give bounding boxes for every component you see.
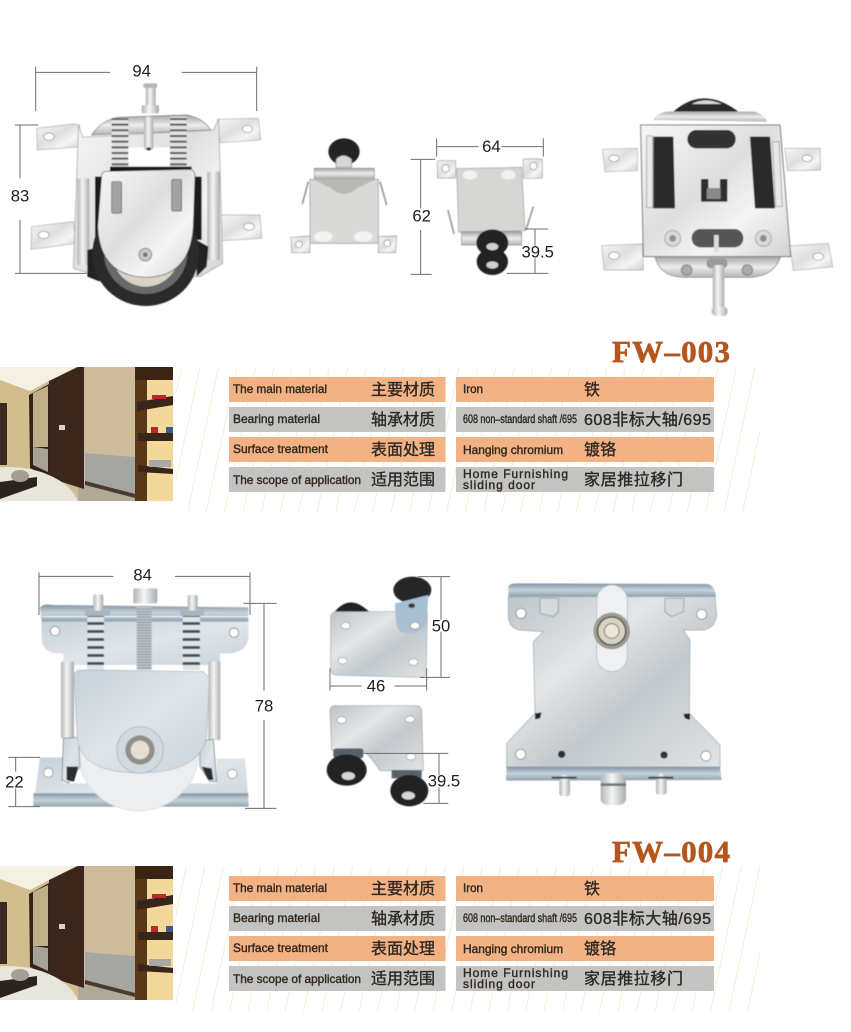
row: surface treatment: Hanging chromium: [463, 443, 563, 457]
row: scope of application: Home Furnishing: [463, 467, 568, 481]
row: main material: [229, 377, 714, 402]
model title: FW-003: FW–003: [612, 334, 730, 369]
row: surface treatment: Surface treatment: [233, 442, 329, 456]
row: bearing material: Bearing material: [233, 412, 320, 426]
row: bearing material: 608 non–standard shaft /695: [463, 911, 577, 925]
row: scope of application: Home Furnishing: [463, 966, 568, 980]
row: scope of application: [229, 467, 714, 492]
row: bearing material: 608 non–standard shaft /695: [463, 412, 577, 426]
row: main material: 铁: [584, 880, 600, 898]
row: scope of application: sliding door: [463, 977, 535, 991]
dimension: height 62: 62: [412, 206, 431, 225]
dimension: width 84: [39, 565, 250, 615]
dimension: width 46: [330, 668, 427, 696]
product photo: FW-003 bracket side views with dimensions: [291, 137, 554, 275]
row: main material: Iron: [463, 881, 483, 895]
row: bearing material: 608非标大轴/695: [584, 411, 711, 429]
row: scope of application: The scope of application: [233, 473, 361, 487]
row: scope of application: [229, 966, 714, 991]
application photo: sliding door room, FW-004: [0, 866, 173, 1032]
dimension: width 94: [36, 61, 257, 111]
row: bearing material: Bearing material: [233, 911, 320, 925]
row: surface treatment: [229, 936, 714, 961]
row: bearing material: 608非标大轴/695: [584, 910, 711, 928]
dimension: 39.5: 39.5: [428, 771, 460, 790]
row: surface treatment: [229, 437, 714, 462]
background: diagonal line texture, FW-003: [176, 367, 760, 512]
dimension: width 46: 46: [367, 677, 385, 696]
row: main material: 主要材质: [371, 381, 435, 399]
row: surface treatment: Hanging chromium: [463, 942, 563, 956]
dimension: height 78: 78: [255, 697, 273, 716]
dimension: width 64: 64: [482, 137, 501, 156]
row: surface treatment: 表面处理: [371, 441, 435, 459]
dimension: 39.5: 39.5: [521, 242, 554, 261]
row: surface treatment: 镀铬: [584, 440, 616, 459]
product photo: FW-004 rear view: [506, 583, 722, 805]
dimension: height 83: 83: [11, 187, 29, 206]
row: scope of application: 适用范围: [371, 471, 435, 489]
row: scope of application: 适用范围: [371, 970, 435, 988]
dimension: width 84: 84: [133, 565, 152, 584]
row: bearing material: [229, 906, 714, 931]
dimension: height 50: [418, 577, 450, 677]
dimension: height 83: [11, 125, 87, 273]
row: main material: The main material: [233, 881, 327, 895]
dimension: height 50: 50: [432, 617, 450, 636]
specification table: FW-003: [229, 377, 714, 492]
dimension: 22: 22: [5, 773, 24, 792]
row: bearing material: [229, 407, 714, 432]
row: surface treatment: 镀铬: [584, 939, 616, 958]
specification table: FW-004: [229, 876, 714, 991]
dimension: height 62: [411, 159, 435, 274]
row: scope of application: The scope of application: [233, 972, 361, 986]
product photo: FW-004 main roller with dimensions: [5, 565, 277, 811]
dimension: height 78: [243, 603, 277, 808]
dimension: 39.5: [363, 753, 460, 803]
product photo: FW-004 bracket side views with dimensions: [327, 577, 460, 806]
row: main material: Iron: [463, 382, 483, 396]
row: main material: The main material: [233, 382, 327, 396]
row: surface treatment: Surface treatment: [233, 941, 329, 955]
application photo: sliding door room, FW-003: [0, 367, 173, 557]
row: main material: 铁: [584, 381, 600, 399]
model title: FW-004: FW–004: [612, 834, 730, 869]
product photo: FW-003 main roller with dimensions: [11, 61, 262, 306]
row: scope of application: 家居推拉移门: [584, 471, 683, 489]
row: surface treatment: 表面处理: [371, 940, 435, 958]
row: bearing material: 轴承材质: [371, 910, 435, 928]
background: diagonal line texture, FW-004: [176, 866, 760, 1011]
row: main material: 主要材质: [371, 880, 435, 898]
row: scope of application: 家居推拉移门: [584, 970, 683, 988]
product photo: FW-003 rear view: [602, 98, 833, 316]
dimension: width 94: 94: [132, 61, 151, 80]
dimension: 22: [5, 757, 40, 807]
row: bearing material: 轴承材质: [371, 411, 435, 429]
row: scope of application: sliding door: [463, 478, 535, 492]
row: main material: [229, 876, 714, 901]
dimension: 39.5: [507, 229, 554, 273]
dimension: width 64: [437, 137, 543, 157]
